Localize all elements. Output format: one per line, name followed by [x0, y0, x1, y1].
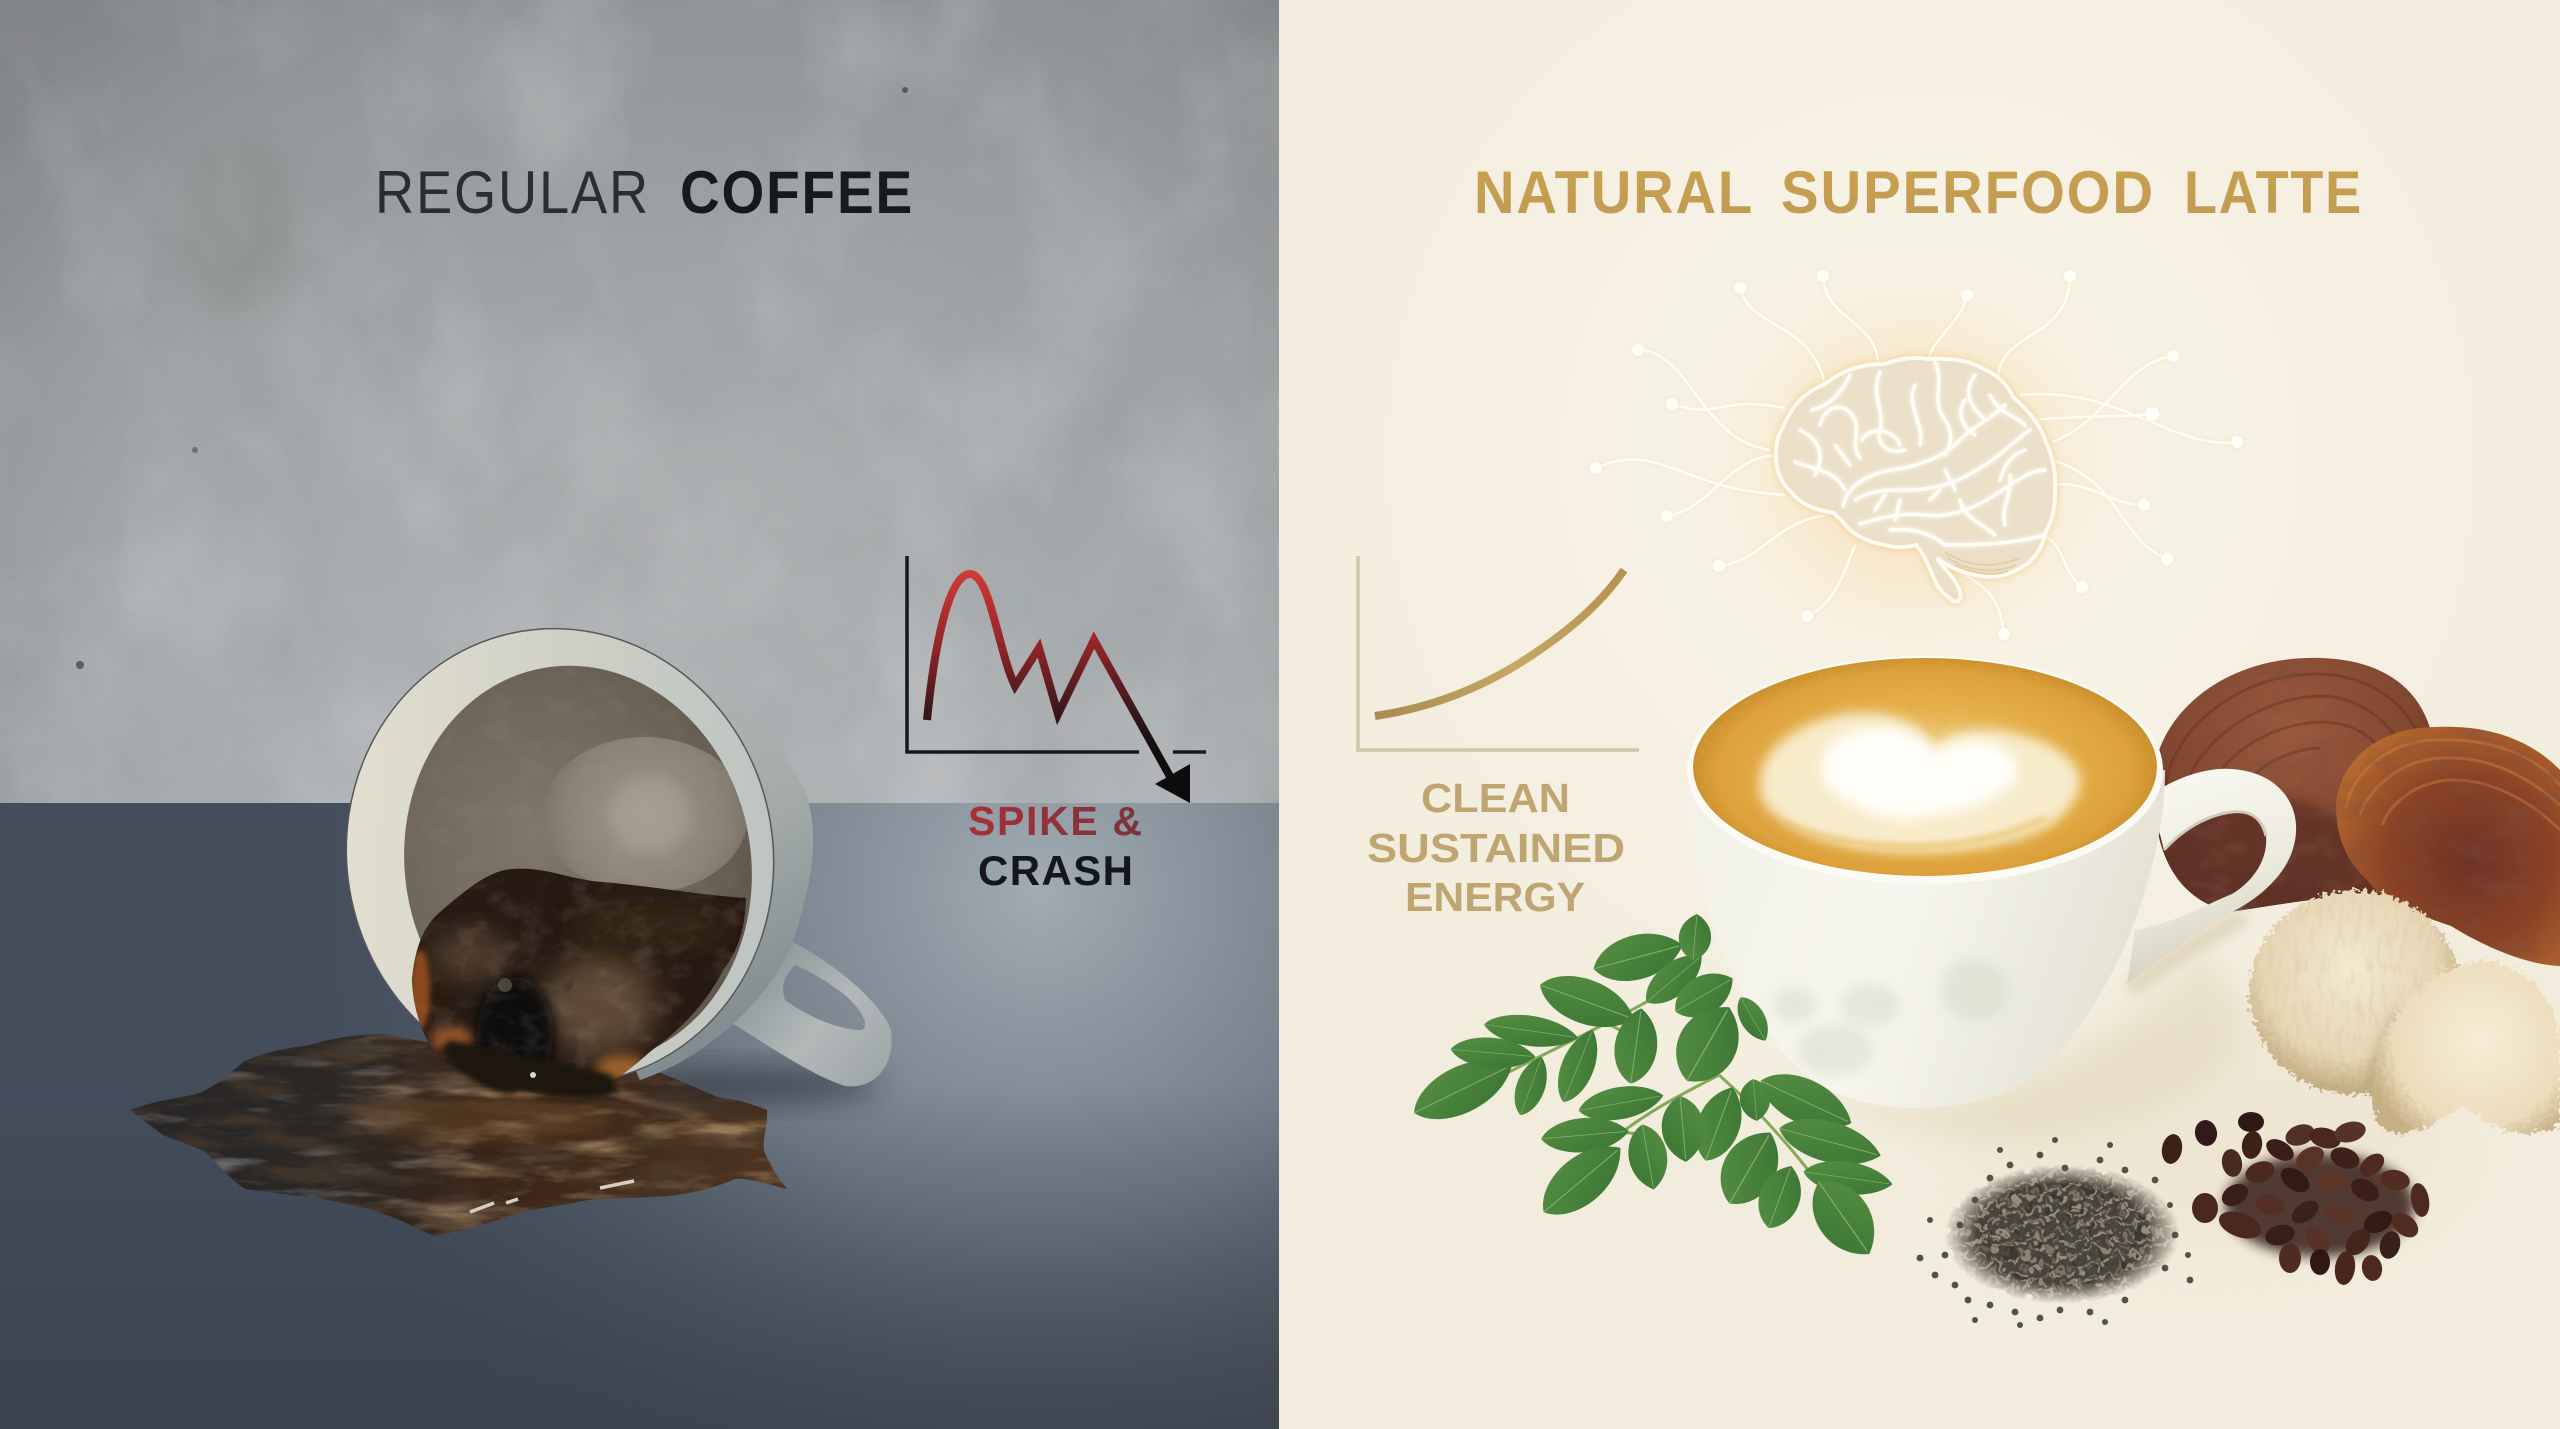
mug interior [404, 666, 752, 1048]
dark table surface [0, 803, 1279, 1429]
drip from mug lip [440, 1040, 620, 1099]
mug handle [2127, 769, 2296, 984]
concrete wall background [0, 0, 1279, 803]
title: REGULAR COFFEE: COFFEE [680, 159, 914, 226]
neuron lines [1596, 276, 2237, 634]
mug body [1686, 770, 2165, 1108]
cream background [1279, 0, 2560, 1429]
title: NATURAL SUPERFOOD LATTE: NATURAL [1474, 159, 1754, 226]
handle shadow [2130, 915, 2245, 990]
panel: natural superfood latte (right) [1279, 0, 2560, 1429]
mug handle [730, 938, 892, 1086]
title: REGULAR COFFEE: REGULAR [375, 159, 650, 226]
lion's mane right [2371, 960, 2560, 1133]
title: NATURAL SUPERFOOD LATTE: SUPERFOOD [1781, 159, 2155, 226]
mug rim [1687, 656, 2163, 884]
coffee remaining in mug [412, 868, 746, 1080]
mug inner base [550, 737, 746, 890]
overturned grey mug [346, 628, 892, 1102]
chia seeds [1917, 1137, 2193, 1328]
lion's mane left [2245, 885, 2465, 1100]
cup shadow [1800, 950, 2243, 1139]
latte swirl cream [1785, 759, 2065, 851]
label: clean sustained energy: ENERGY [1405, 874, 1585, 920]
title: NATURAL SUPERFOOD LATTE [1474, 159, 2363, 226]
clean energy chart [1358, 556, 1639, 750]
cerebellum [1945, 552, 2020, 574]
chia pile [1944, 1164, 2180, 1304]
label: clean sustained energy: CLEAN [1421, 775, 1570, 821]
brain silhouette [1776, 358, 2055, 602]
neuron nodes [1590, 270, 2243, 640]
title: REGULAR COFFEE [379, 170, 910, 214]
moringa leaves [1730, 991, 1776, 1047]
moringa sprigs [1404, 913, 1895, 1269]
label: spike and crash [968, 798, 1142, 894]
axes [1358, 556, 1639, 750]
mug rim [346, 628, 774, 1077]
lion's mane mushrooms [2245, 885, 2560, 1133]
panel: regular coffee (left) [0, 0, 1279, 1429]
stems [1470, 975, 1847, 1222]
axes [907, 556, 1206, 752]
reishi back [2140, 650, 2450, 920]
label: spike and crash: SPIKE & [968, 798, 1142, 844]
crash arrowhead [1155, 764, 1190, 803]
faint leaf reflection [1773, 958, 2009, 1076]
white latte mug [1686, 655, 2296, 1108]
title: NATURAL SUPERFOOD LATTE: LATTE [2184, 159, 2363, 226]
latte art heart [1760, 713, 2080, 851]
label: spike and crash: CRASH [978, 847, 1133, 894]
label: clean sustained energy [1367, 775, 1625, 920]
spike line [927, 574, 1172, 780]
spike and crash chart [907, 556, 1206, 803]
brain folds [1795, 362, 2045, 545]
reishi mushrooms [2140, 650, 2560, 970]
cacao nibs [2160, 1112, 2432, 1286]
icon: glowing brain with neurons [1590, 230, 2243, 700]
latte surface [1690, 655, 2160, 880]
reishi back underside [2150, 795, 2358, 915]
mug shadow [640, 1065, 880, 1105]
scattered chia [1917, 1137, 2193, 1328]
reishi front [2330, 720, 2560, 970]
label: clean sustained energy: SUSTAINED [1367, 825, 1625, 871]
brain glow [1665, 230, 2165, 700]
crease between caps [2372, 1010, 2400, 1085]
rising curve [1375, 570, 1624, 716]
mug body [636, 763, 813, 1080]
spilled coffee puddle [131, 1034, 787, 1236]
